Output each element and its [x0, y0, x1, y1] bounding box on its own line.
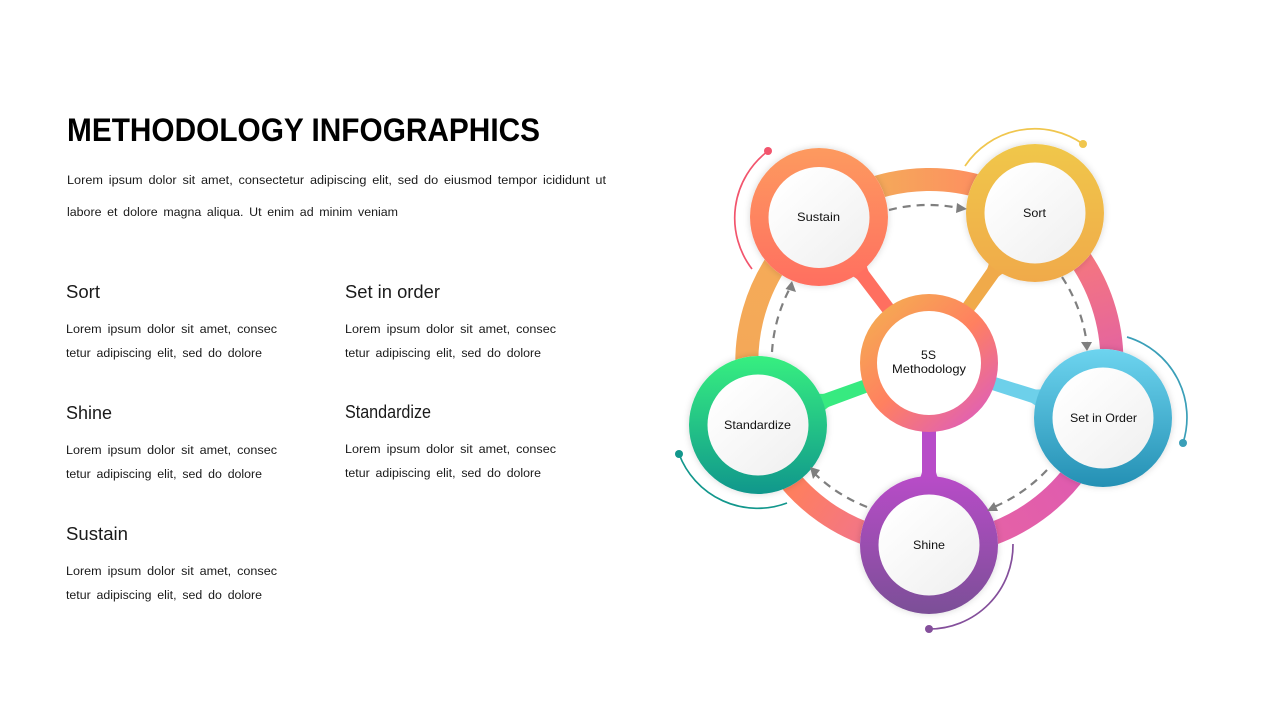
accent arc: Sort: [965, 129, 1087, 166]
arrow: Standardize to Sustain: [772, 281, 796, 352]
spoke: Set in Order to hub: [966, 366, 1044, 408]
text block: Sort: tetur adipiscing elit, sed do dolore: [66, 346, 262, 360]
accent arc: Shine: [925, 544, 1013, 633]
text block: Standardize: Lorem ipsum dolor sit amet, consec: [345, 442, 556, 456]
text block: Sustain: Sustain: [66, 524, 128, 544]
arrow: Shine to Standardize: [810, 467, 867, 507]
text block: Sort: Lorem ipsum dolor sit amet, consec: [66, 322, 277, 336]
text block: Set in order: tetur adipiscing elit, sed do dolore: [345, 346, 541, 360]
outer ring: [747, 179, 1112, 545]
node: Shine: [860, 476, 998, 614]
node: Shine: Shine: [913, 538, 945, 552]
diagram: 5S methodology cycle: [675, 129, 1187, 633]
text block: Sort: Sort: [66, 282, 100, 302]
spoke: Standardize to hub: [816, 368, 893, 412]
node: Set in Order: Set in Order: [1070, 411, 1137, 425]
node: Sort: [966, 144, 1104, 282]
node: central hub: 5S: [921, 348, 936, 362]
title: METHODOLOGY INFOGRAPHICS: [67, 112, 540, 148]
text block: Set in order: Set in order: [345, 282, 440, 302]
arrow: Set in Order to Shine: [987, 470, 1047, 511]
text block: Shine: [66, 403, 277, 481]
accent arc: Standardize: [675, 450, 787, 508]
accent arc: Set in Order: [1127, 337, 1187, 447]
accent arc: Sustain: [735, 147, 772, 269]
node: Standardize: [689, 356, 827, 494]
text block: Set in order: [345, 282, 556, 360]
node: Standardize: Standardize: [724, 418, 791, 432]
node: Sustain: Sustain: [797, 210, 840, 224]
text block: Set in order: Lorem ipsum dolor sit amet, consec: [345, 322, 556, 336]
intro paragraph: labore et dolore magna aliqua. Ut enim ad minim veniam: [67, 205, 398, 219]
text block: Shine: Lorem ipsum dolor sit amet, consec: [66, 443, 277, 457]
node: central hub: Methodology: [892, 362, 966, 376]
text block: Sort: [66, 282, 277, 360]
node: Set in Order: [1034, 349, 1172, 487]
arrow: Sort to Set in Order: [1062, 277, 1092, 351]
intro paragraph: Lorem ipsum dolor sit amet, consectetur adipiscing elit, sed do eiusmod tempor icididunt ut: [67, 173, 607, 187]
text block: Standardize: Standardize: [345, 402, 431, 422]
spoke: Shine to hub: [919, 405, 939, 480]
text block: Sustain: tetur adipiscing elit, sed do dolore: [66, 588, 262, 602]
text block: Standardize: tetur adipiscing elit, sed do dolore: [345, 466, 541, 480]
node: Sustain: [750, 148, 888, 286]
text block: Sustain: Lorem ipsum dolor sit amet, consec: [66, 564, 277, 578]
spoke: Sort to hub: [946, 260, 1006, 333]
text block: Standardize: [345, 402, 556, 480]
spoke: Sustain to hub: [850, 263, 911, 335]
node: central hub: [860, 294, 998, 432]
text block: Shine: Shine: [66, 403, 112, 423]
text block: Shine: tetur adipiscing elit, sed do dolore: [66, 467, 262, 481]
text block: Sustain: [66, 524, 277, 602]
arrow: Sustain to Sort: [889, 203, 967, 213]
node: Sort: Sort: [1023, 206, 1047, 220]
intro paragraph: [67, 173, 607, 219]
